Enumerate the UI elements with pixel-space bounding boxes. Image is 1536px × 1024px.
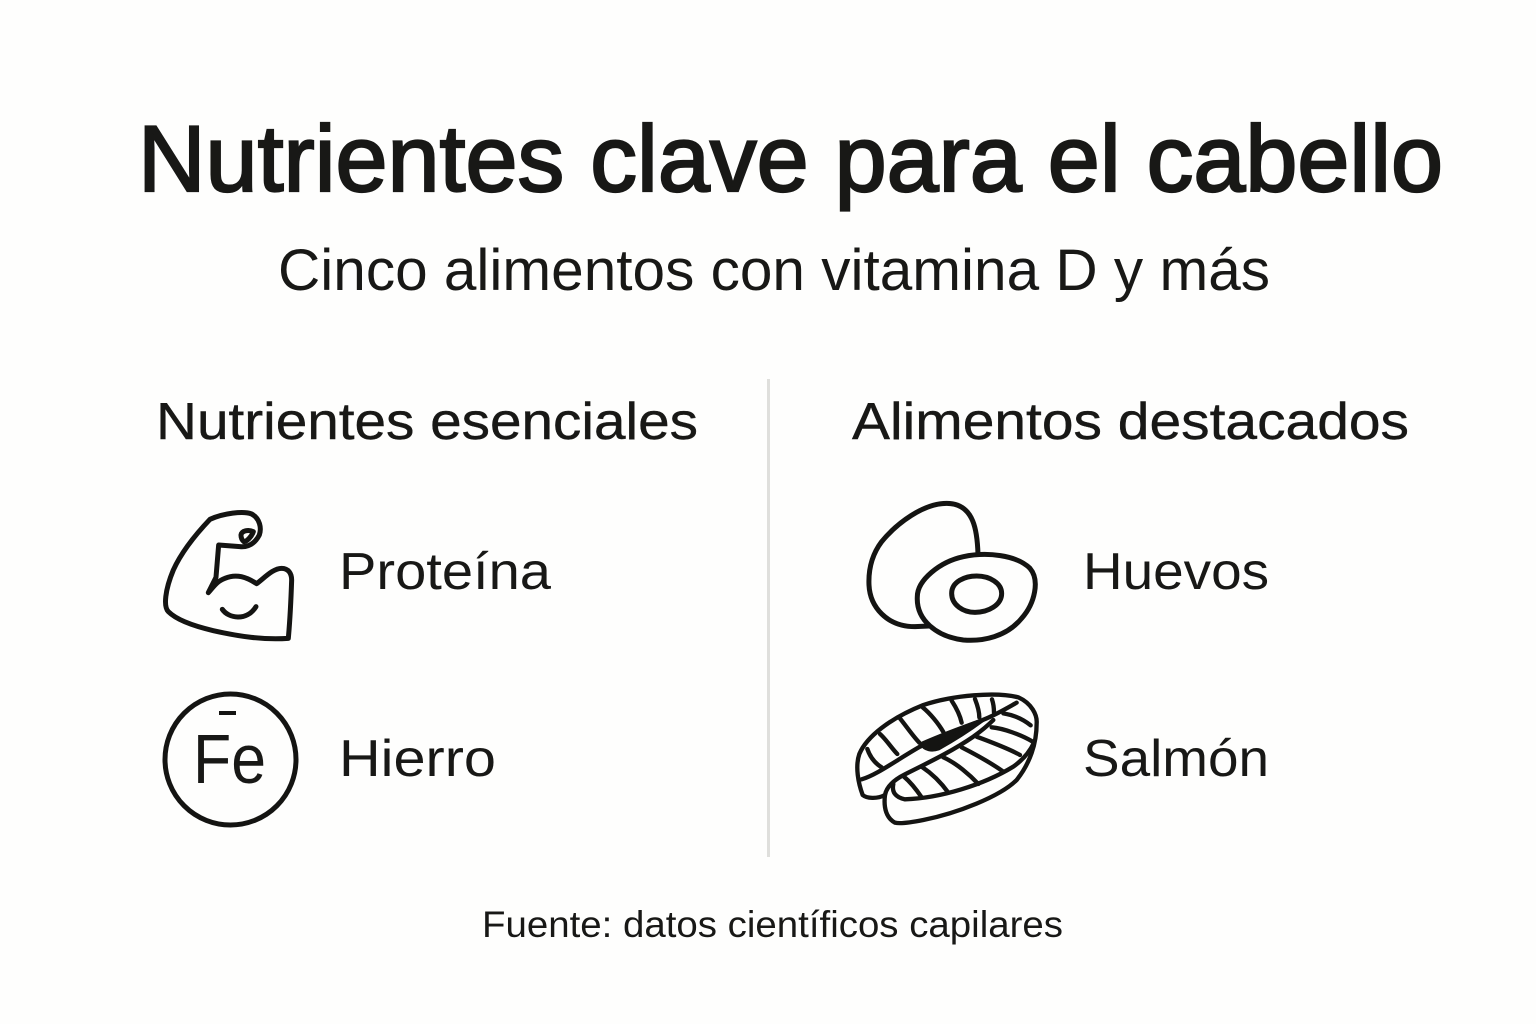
heading: nutrientes esenciales: Nutrientes esenciales xyxy=(156,393,698,451)
label: proteína: Proteína xyxy=(339,543,551,601)
panel: nutrientes esenciales xyxy=(156,393,698,825)
source note: Fuente: datos científicos capilares xyxy=(482,904,1063,945)
title: Nutrientes clave para el cabello xyxy=(138,106,1443,211)
panel: alimentos destacados xyxy=(852,393,1409,823)
icon: salmon steak xyxy=(857,695,1037,823)
icon: flexed arm xyxy=(166,513,292,639)
icon: eggs xyxy=(869,503,1035,640)
label: hierro: Hierro xyxy=(339,730,496,788)
label: salmón: Salmón xyxy=(1083,730,1269,788)
divider xyxy=(767,379,770,857)
icon: iron element: Fe xyxy=(193,720,266,798)
icon: iron element xyxy=(165,694,296,825)
heading: alimentos destacados: Alimentos destacados xyxy=(852,393,1409,451)
subtitle: Cinco alimentos con vitamina D y más xyxy=(278,238,1270,303)
label: huevos: Huevos xyxy=(1083,543,1269,601)
